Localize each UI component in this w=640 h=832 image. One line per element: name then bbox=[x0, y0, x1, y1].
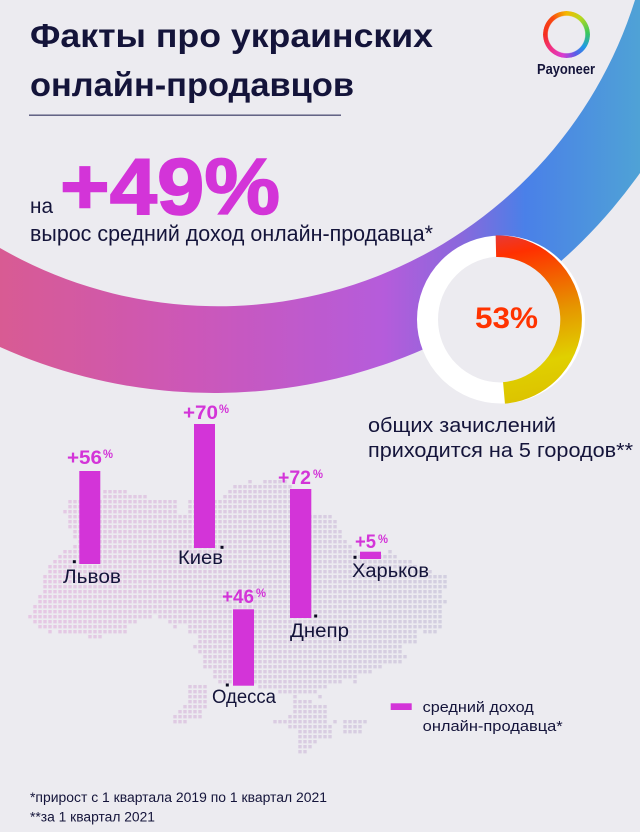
bar bbox=[290, 489, 311, 618]
percent sign: % bbox=[378, 532, 388, 546]
name: Киев bbox=[178, 548, 223, 569]
marker bbox=[220, 546, 224, 549]
city: Днепр bbox=[278, 467, 349, 642]
value: +5 bbox=[355, 532, 376, 553]
name: Одесса bbox=[212, 687, 276, 708]
marker bbox=[354, 556, 356, 559]
name: Харьков bbox=[352, 561, 429, 582]
headline stat: +49%: +49% bbox=[60, 142, 280, 231]
headline stat: +49% bbox=[30, 142, 433, 246]
legend text: средний доход bbox=[423, 699, 534, 716]
legend text: онлайн-продавца* bbox=[423, 718, 563, 735]
donut caption bbox=[368, 415, 633, 462]
city: Киев bbox=[178, 402, 229, 569]
legend bbox=[391, 699, 563, 735]
footnotes: **за 1 квартал 2021 bbox=[30, 810, 155, 824]
value: +46 bbox=[222, 587, 254, 608]
footnotes: *прирост с 1 квартала 2019 по 1 квартал 2021 bbox=[30, 790, 327, 805]
bar bbox=[79, 471, 100, 564]
gradient arc band bbox=[0, 0, 640, 393]
title: онлайн-продавцов bbox=[30, 66, 354, 103]
donut caption: общих зачислений bbox=[368, 415, 556, 437]
donut chart: 53% bbox=[428, 246, 574, 393]
bar bbox=[360, 552, 381, 559]
logo wordmark: Payoneer bbox=[537, 61, 595, 78]
marker bbox=[314, 614, 317, 618]
dot map of Ukraine bbox=[28, 482, 447, 752]
headline stat: +49%: вырос средний доход онлайн-продавца* bbox=[30, 221, 433, 246]
city: Одесса bbox=[212, 586, 276, 708]
percent sign: % bbox=[256, 586, 266, 600]
marker bbox=[226, 684, 229, 686]
name: Днепр bbox=[290, 621, 349, 642]
donut value arc bbox=[496, 246, 571, 393]
city: Харьков bbox=[352, 532, 429, 582]
value: +56 bbox=[67, 448, 102, 469]
title bbox=[30, 17, 434, 103]
title underline bbox=[29, 114, 341, 116]
donut value: 53% bbox=[475, 302, 538, 335]
logo ring bbox=[543, 11, 590, 58]
value: +72 bbox=[278, 468, 311, 489]
logo: Payoneer bbox=[537, 11, 595, 78]
bar bbox=[233, 609, 254, 686]
percent sign: % bbox=[103, 447, 113, 461]
legend swatch bbox=[391, 703, 412, 710]
value: +70 bbox=[183, 403, 218, 424]
name: Львов bbox=[63, 567, 121, 588]
percent sign: % bbox=[313, 467, 323, 481]
donut caption: приходится на 5 городов** bbox=[368, 440, 633, 462]
marker bbox=[73, 560, 76, 563]
bar bbox=[194, 424, 215, 548]
footnotes bbox=[30, 790, 327, 824]
city: Львов bbox=[63, 447, 121, 588]
headline stat: +49%: на bbox=[30, 195, 53, 218]
title: Факты про украинских bbox=[30, 17, 434, 54]
percent sign: % bbox=[219, 402, 229, 416]
